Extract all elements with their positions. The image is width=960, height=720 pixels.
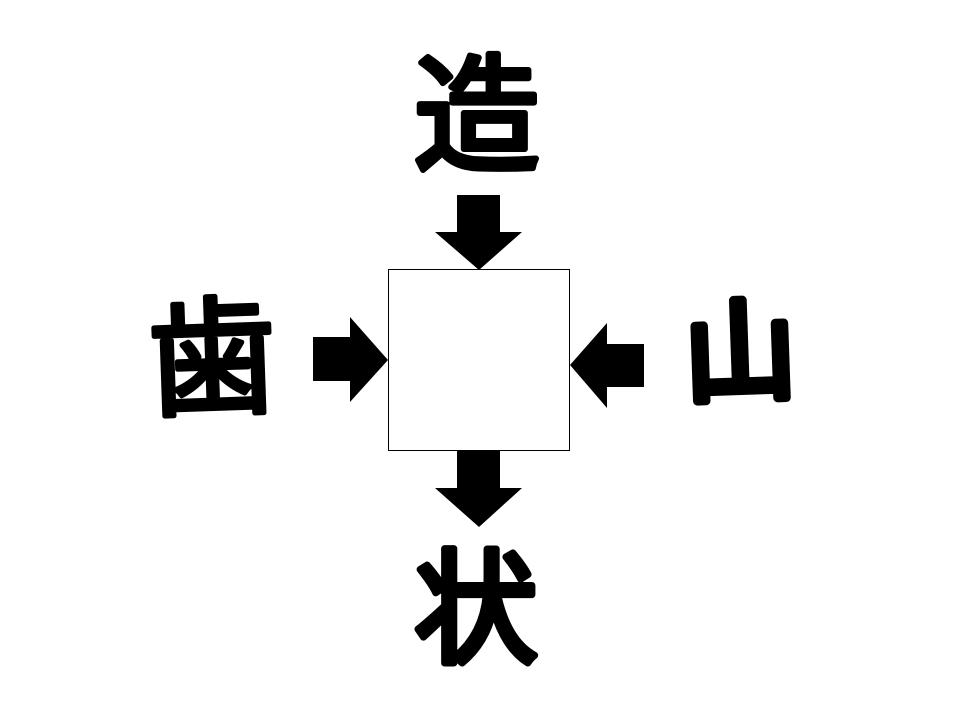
kanji: right: 山 — [682, 289, 798, 418]
arrow: right to left — [570, 323, 644, 408]
center empty box — [388, 270, 570, 450]
kanji: bottom: 状 — [414, 542, 538, 680]
arrow: top down — [435, 195, 522, 270]
arrow: bottom down — [435, 451, 522, 527]
arrow: left to right — [313, 317, 388, 402]
kanji: top: 造 — [413, 46, 541, 188]
kanji: left: 歯 — [146, 287, 279, 434]
